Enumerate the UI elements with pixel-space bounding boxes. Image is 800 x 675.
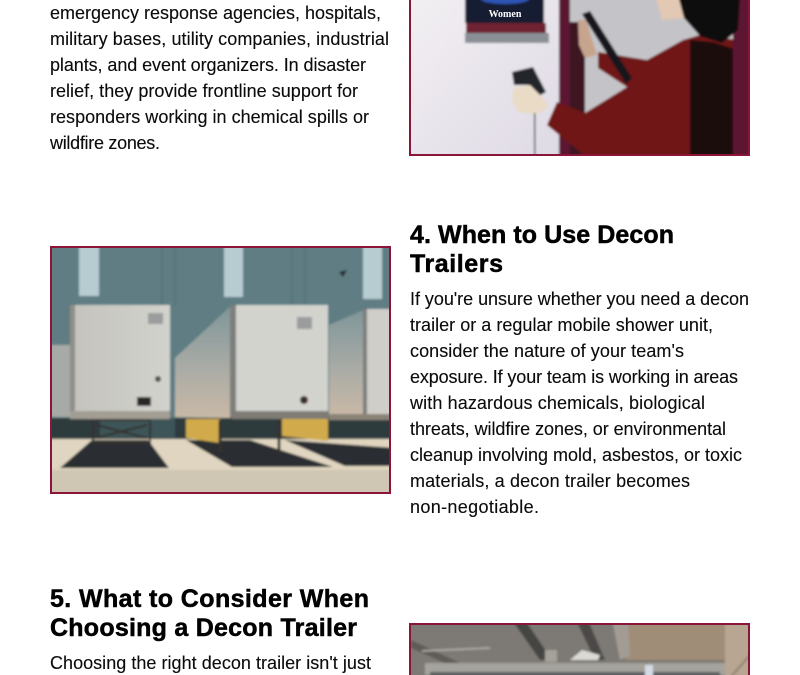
heading: section 5: 5. What to Consider When [50,585,369,613]
text block: section 3 closing paragraph: responders working in chemical spills or [50,107,369,127]
text block: section 4 paragraph: consider the nature of your team's [410,341,684,361]
photo: person inspecting a restroom door with a handheld device [405,0,754,162]
trailer 3 [329,309,366,416]
text block: section 4 paragraph: non-negotiable. [410,497,539,517]
heading: section 4: 4. When to Use Decon [410,221,674,249]
trailer 1 [70,305,170,419]
text block: section 4 paragraph: exposure. If your team is working in areas [410,367,738,387]
text block: section 4 paragraph: with hazardous chemicals, biological [409,393,705,413]
text block: section 4 paragraph: trailer or a regular mobile shower unit, [410,315,713,335]
text block: section 3 closing paragraph: military bases, utility companies, industrial [50,29,389,49]
text block: section 4 paragraph: materials, a decon trailer becomes [410,471,690,491]
text block: section 4 paragraph [409,289,749,517]
text block: section 3 closing paragraph: wildfire zones. [49,133,160,153]
text block: section 3 closing paragraph: emergency response agencies, hospitals, [50,3,381,23]
heading: section 5 [50,585,369,642]
photo: decon trailer inside a warehouse [405,620,755,675]
sign label: Women [489,9,522,20]
text block: section 4 paragraph: threats, wildfire zones, or environmental [410,419,726,439]
text block: section 5 paragraph opening: Choosing the right decon trailer isn't just [50,653,371,673]
text block: section 3 closing paragraph: plants, and event organizers. In disaster [50,55,366,75]
heading: section 5: Choosing a Decon Trailer [50,614,357,642]
trailer 2 [175,305,232,418]
text block: section 3 closing paragraph [49,3,389,153]
heading: section 4: Trailers [410,250,503,278]
text block: section 4 paragraph: cleanup involving mold, asbestos, or toxic [410,445,742,465]
heading: section 4 [410,221,674,278]
text block: section 3 closing paragraph: relief, they provide frontline support for [50,81,358,101]
ground [52,436,389,471]
text block: section 4 paragraph: If you're unsure whether you need a decon [410,289,749,309]
photo: white trailers parked at loading dock [45,240,396,500]
